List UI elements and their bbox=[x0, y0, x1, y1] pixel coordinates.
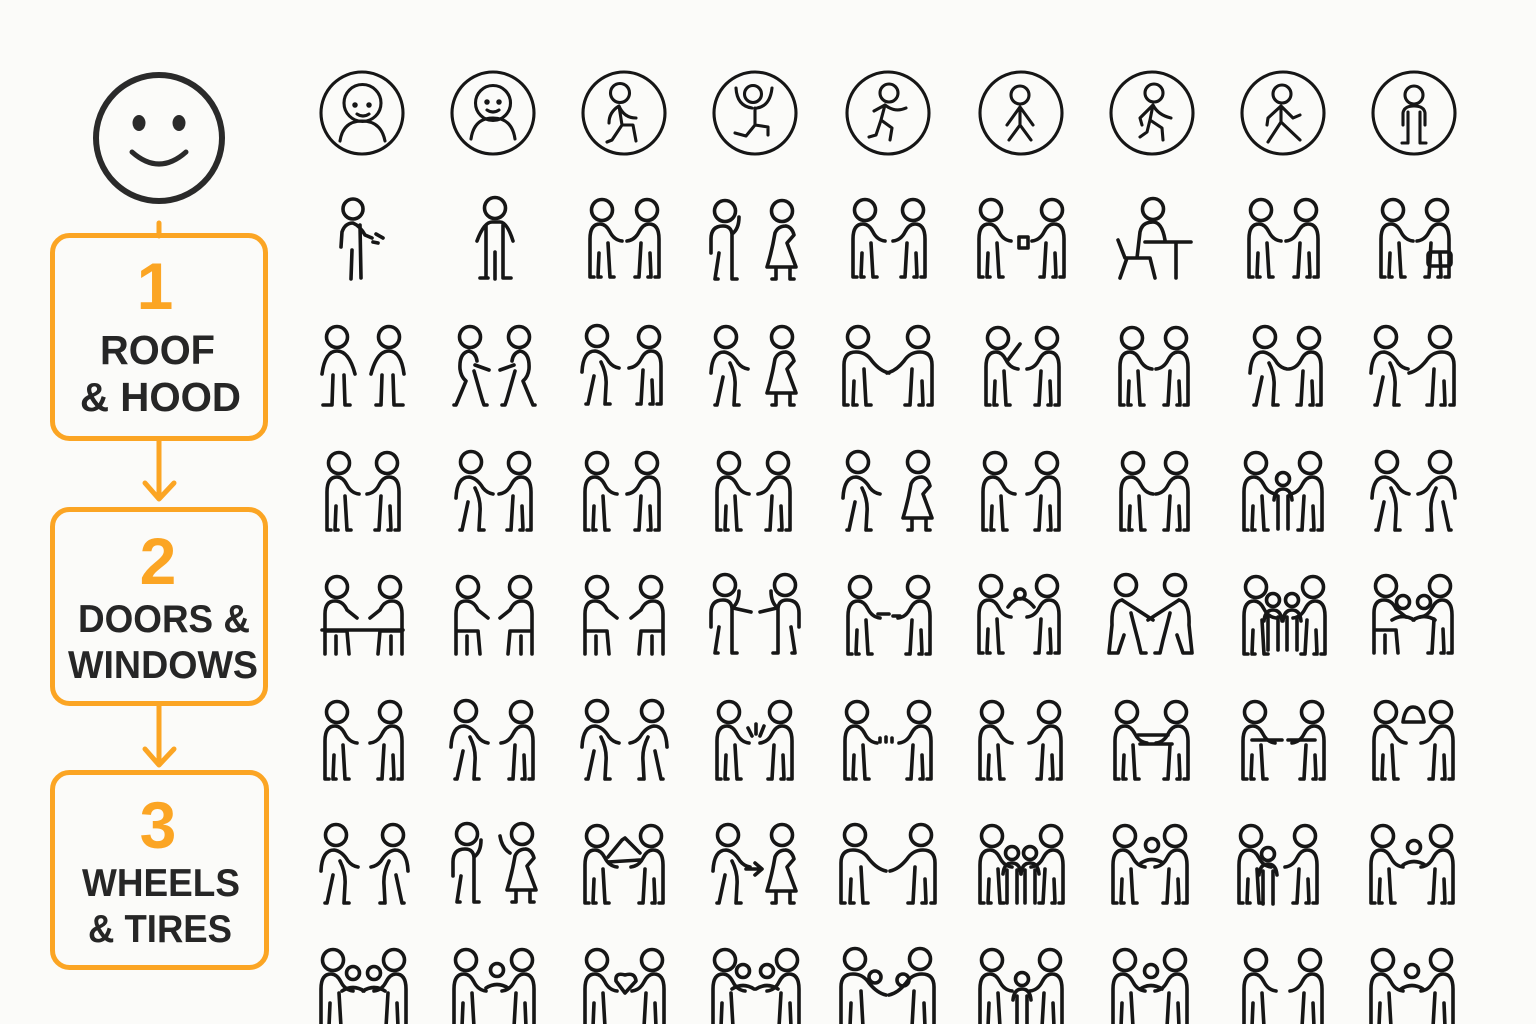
icon: two people talking bbox=[983, 452, 1059, 530]
icon: two people standing bbox=[322, 326, 404, 405]
icon: serving a dish bbox=[1374, 702, 1453, 779]
panel: process flow bbox=[52, 75, 266, 968]
icon: family with child bbox=[1113, 826, 1187, 903]
icon: two people reaching bbox=[848, 576, 930, 654]
row 4: pictograms bbox=[327, 452, 1455, 530]
arrow from step 2 to step 3 bbox=[145, 705, 174, 765]
panel: step 2 doors and windows bbox=[52, 510, 266, 704]
icon: two people walking bbox=[321, 824, 408, 903]
icon: passing a child bbox=[841, 948, 934, 1024]
icon: handshake bbox=[1121, 452, 1188, 530]
icon: reaching out bbox=[1371, 326, 1454, 405]
row 7: pictograms bbox=[321, 824, 1453, 904]
icon: person with arrow bbox=[713, 824, 796, 903]
icon: serving a dish bbox=[979, 576, 1059, 653]
icon: walking figure bbox=[1242, 72, 1324, 154]
icon: handing over a cup bbox=[979, 200, 1064, 277]
icon: person with bag bbox=[1381, 200, 1451, 277]
row 1: circular person icons bbox=[321, 72, 1455, 154]
icon: person standing bbox=[477, 198, 513, 279]
icon: two people seated bbox=[585, 576, 663, 654]
icon: family at table bbox=[454, 950, 534, 1024]
icon: family with two children bbox=[980, 826, 1063, 903]
icon: exchange with dashes bbox=[845, 702, 931, 779]
icon: family with child bbox=[1113, 950, 1187, 1024]
icon: jumping figure bbox=[714, 72, 796, 154]
icon: exchange bbox=[717, 702, 792, 779]
panel: step 1 roof and hood bbox=[52, 236, 266, 438]
row 2: pictograms bbox=[341, 198, 1451, 279]
icon: smiling bust bbox=[321, 72, 403, 154]
icon: two people reaching bbox=[582, 326, 661, 404]
icon: handing over bbox=[451, 700, 533, 779]
icon: family with child bbox=[1244, 452, 1322, 530]
step number 2: 2 bbox=[140, 524, 176, 598]
icon: two people standing bbox=[325, 702, 402, 779]
icon: two people talking bbox=[585, 452, 659, 530]
icon: person seated at table bbox=[1118, 198, 1191, 278]
icon: two people with stick bbox=[986, 328, 1059, 405]
panel: pictogram grid bbox=[321, 72, 1455, 1024]
connector from smiley to step 1 bbox=[156, 223, 162, 236]
icon: two people exchanging bbox=[590, 200, 659, 277]
icon: two people reaching bbox=[456, 452, 531, 530]
icon: family with child bbox=[1371, 950, 1453, 1024]
icon: two people walking bbox=[582, 700, 667, 779]
icon: two people holding items bbox=[711, 200, 796, 279]
icon: man and woman bbox=[843, 452, 932, 530]
icon: family with two children bbox=[713, 950, 799, 1024]
icon: handshake bbox=[853, 200, 925, 277]
row 8: pictograms bbox=[321, 948, 1453, 1024]
icon: handshake bbox=[1120, 328, 1188, 405]
icon: handshake bbox=[1250, 326, 1321, 405]
icon: two people seated at table bbox=[322, 576, 403, 654]
icon: two people standing bbox=[327, 452, 399, 530]
panel: step 3 wheels and tires bbox=[52, 772, 266, 968]
icon: wide arms joined bbox=[1109, 574, 1192, 653]
step 1 label: & HOOD bbox=[80, 374, 241, 420]
icon: two people walking bbox=[1372, 452, 1455, 530]
icon: walking figure bbox=[583, 72, 665, 154]
icon: wide handshake bbox=[841, 824, 935, 903]
icon: two people greeting bbox=[711, 574, 799, 653]
icon: two people walking bbox=[454, 326, 535, 405]
step number 3: 3 bbox=[140, 788, 176, 862]
icon: man and woman bbox=[711, 326, 796, 405]
icon: family with two children bbox=[321, 950, 406, 1024]
icon: handshake bbox=[1244, 950, 1322, 1024]
icon: handshake bbox=[1243, 702, 1324, 779]
icon: running figure bbox=[847, 72, 929, 154]
step 3 label: & TIRES bbox=[88, 908, 232, 951]
arrow from step 1 to step 2 bbox=[145, 440, 174, 499]
icon: smiling bust bbox=[452, 72, 534, 154]
icon: two people with child bbox=[1374, 576, 1452, 653]
icon: holding a triangle bbox=[585, 826, 663, 903]
icon: handshake bbox=[717, 452, 790, 530]
icon: family with child bbox=[980, 950, 1062, 1024]
icon: two people seated bbox=[456, 576, 532, 654]
icon: holding a heart bbox=[585, 950, 664, 1024]
icon: family with child bbox=[1371, 826, 1453, 903]
step 2 label: WINDOWS bbox=[68, 644, 258, 687]
icon: running figure bbox=[1111, 72, 1193, 154]
icon: holding a long table bbox=[1115, 702, 1188, 779]
icon: man and woman bbox=[453, 824, 536, 902]
step number 1: 1 bbox=[137, 249, 173, 323]
icon: wide handshake bbox=[844, 326, 932, 405]
icon: person gesturing bbox=[341, 199, 383, 279]
icon: family with child bbox=[1239, 826, 1317, 904]
icon: two people talking bbox=[980, 702, 1061, 779]
row 3: pictograms bbox=[322, 326, 1454, 405]
icon: standing figure bbox=[980, 72, 1062, 154]
icon: smiley face bbox=[96, 75, 222, 201]
icon: family with two children bbox=[1244, 576, 1325, 654]
step 3 label: WHEELS bbox=[82, 862, 240, 905]
row 6: pictograms bbox=[325, 700, 1453, 779]
icon: standing figure bbox=[1373, 72, 1455, 154]
step 2 label: DOORS & bbox=[78, 598, 250, 641]
row 5: pictograms bbox=[322, 574, 1452, 654]
icon: handshake bbox=[1249, 200, 1318, 277]
step 1 label: ROOF bbox=[100, 327, 215, 373]
